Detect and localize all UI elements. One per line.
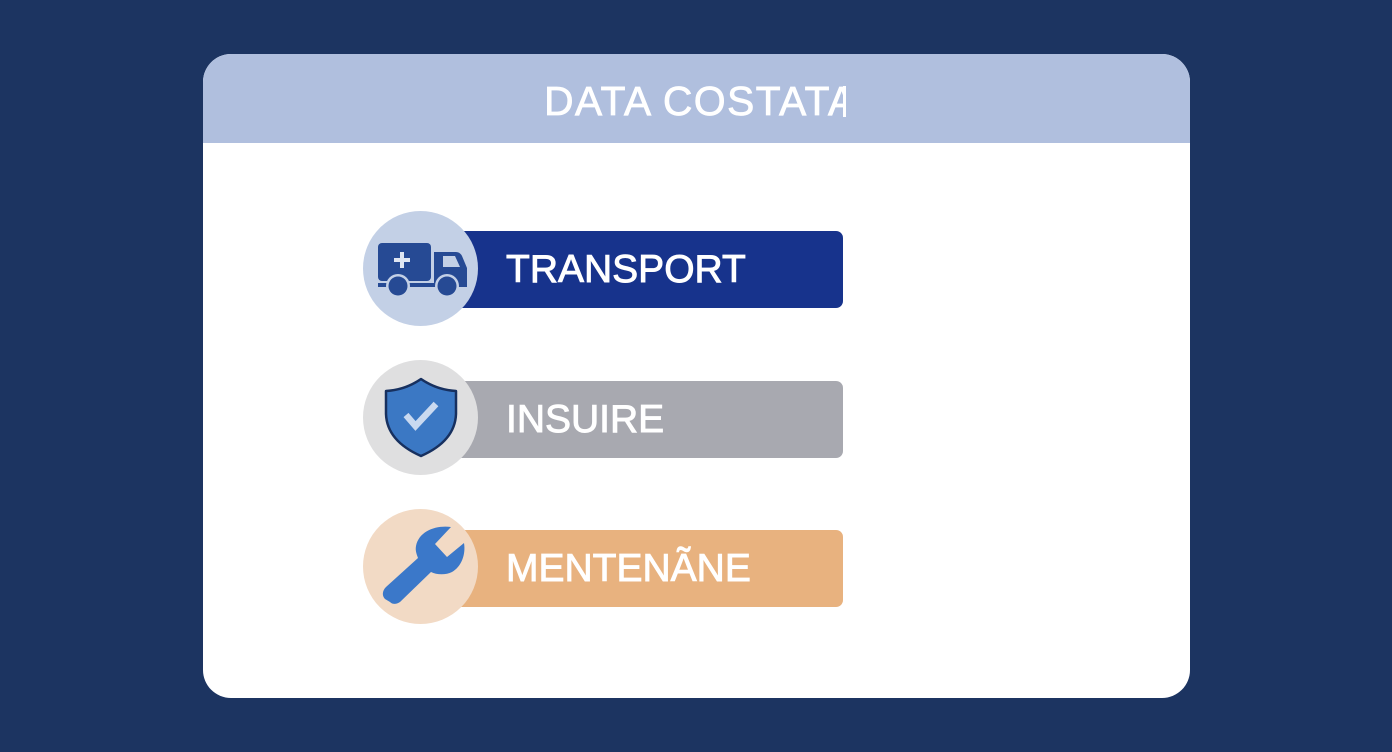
icon: wrench <box>383 527 464 604</box>
bar: transport <box>440 231 843 308</box>
bar: insure <box>440 381 843 458</box>
label: insure: INSUIRE <box>506 398 664 441</box>
circle: insure icon background <box>363 360 478 475</box>
bar: maintenance <box>440 530 843 607</box>
label: transport: TRANSPORT <box>506 248 746 291</box>
icon: shield with check <box>386 379 456 456</box>
label: maintenance: MENTENÃNE <box>506 547 751 590</box>
panel: data card <box>203 54 1190 698</box>
icon: medical truck <box>378 243 467 298</box>
circle: transport icon background <box>363 211 478 326</box>
header band <box>203 54 1190 143</box>
circle: maintenance icon background <box>363 509 478 624</box>
